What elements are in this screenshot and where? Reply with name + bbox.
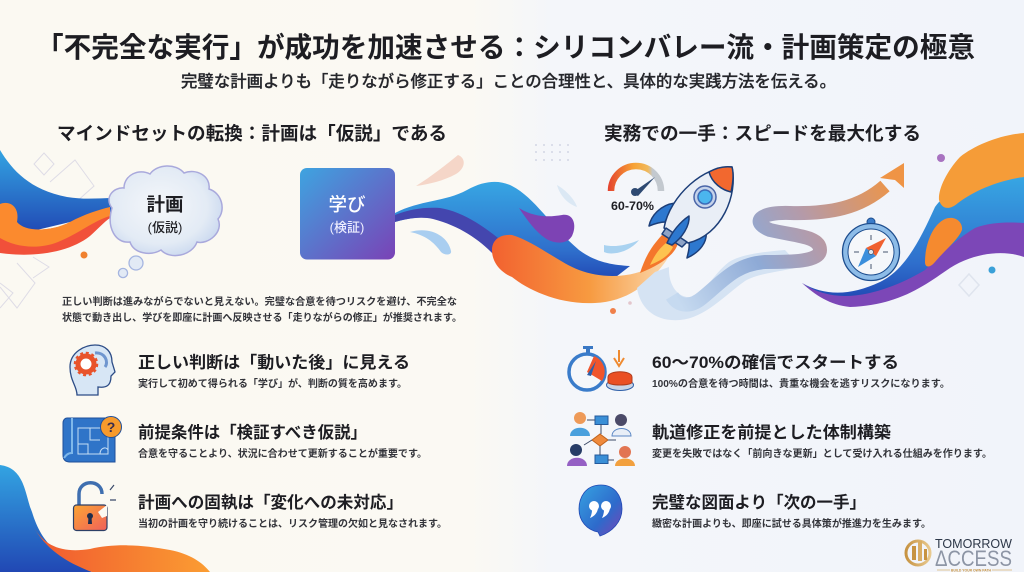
item: course correction: 軌道修正を前提とした体制構築 (652, 422, 892, 442)
compass (842, 218, 900, 280)
item: right judgement (138, 352, 410, 390)
item: assumptions (138, 422, 427, 460)
body paragraph: 状態で動き出し、学びを即座に計画へ反映させる「走りながらの修正」が推奨されます。 (62, 311, 462, 324)
logo: Tomorrow Access (906, 536, 1013, 572)
item: next move (652, 492, 931, 530)
right side accents (937, 154, 996, 296)
wave: central (395, 182, 668, 303)
wave: bottom left (0, 465, 210, 572)
item: next move: 緻密な計画よりも、即座に試せる具体策が推進力を生みます。 (652, 517, 931, 530)
heading: practice: 実務での一手：スピードを最大化する (604, 123, 921, 144)
learning square: (検証) (330, 220, 364, 235)
icon: blueprint question (63, 416, 122, 462)
icon: head with gear (70, 345, 115, 395)
item: plan fixation: 当初の計画を守り続けることは、リスク管理の欠如と見なされます。 (138, 517, 447, 530)
title: 「不完全な実行」が成功を加速させる：シリコンバレー流・計画策定の極意 (36, 32, 975, 63)
item: plan fixation (138, 493, 447, 530)
small swooshes (557, 185, 639, 314)
subtitle: 完璧な計画よりも「走りながら修正する」ことの合理性と、具体的な実践方法を伝える。 (181, 72, 836, 91)
gauge: 60-70%: 60-70% (611, 199, 654, 213)
item: start at 60-70% (652, 353, 950, 390)
logo: Tomorrow Access: TOMORROW (935, 536, 1013, 551)
item: start at 60-70%: 100%の合意を待つ時間は、貴重な機会を逃すリスクになります。 (652, 377, 950, 390)
icon: broken lock (74, 483, 116, 530)
body paragraph: 正しい判断は進みながらでないと見えない。完璧な合意を待つリスクを避け、不完全な (62, 295, 457, 308)
item: right judgement: 正しい判断は「動いた後」に見える (138, 352, 410, 372)
rocket (640, 167, 733, 273)
swoosh: winding path arrow (637, 163, 904, 320)
thought cloud: plan: 計画 (146, 194, 184, 215)
icon: blueprint question: ? (107, 419, 115, 435)
learning square (300, 168, 395, 260)
accents near square (410, 155, 464, 255)
learning square: 学び (328, 194, 366, 215)
icon: quote bubble (579, 485, 622, 536)
item: assumptions: 合意を守ることより、状況に合わせて更新することが重要です。 (138, 447, 427, 460)
thought cloud: plan (109, 166, 222, 278)
dotted grid (535, 144, 569, 161)
item: start at 60-70%: 60〜70%の確信でスタートする (652, 353, 899, 372)
item: right judgement: 実行して初めて得られる「学び」が、判断の質を高めます。 (138, 377, 407, 390)
decorative diamonds left (0, 153, 94, 308)
wave: right (802, 133, 1024, 307)
wave: left upper (0, 150, 112, 255)
thought cloud: plan: (仮説) (148, 220, 182, 235)
item: course correction: 変更を失敗ではなく「前向きな更新」として受け入れる仕組みを作ります。 (652, 447, 992, 460)
item: course correction (652, 422, 992, 460)
icon: stopwatch and button (569, 346, 634, 390)
item: assumptions: 前提条件は「検証すべき仮説」 (138, 422, 367, 442)
icon: team flowchart (567, 412, 635, 466)
body paragraph (62, 295, 462, 324)
gauge: 60-70% (611, 166, 661, 213)
item: next move: 完璧な図面より「次の一手」 (652, 492, 866, 512)
logo: Tomorrow Access: ΔCCESS (935, 546, 1012, 571)
item: plan fixation: 計画への固執は「変化への未対応」 (138, 493, 403, 512)
dot: orange (80, 252, 88, 258)
heading: mindset: マインドセットの転換：計画は「仮説」である (57, 123, 447, 144)
